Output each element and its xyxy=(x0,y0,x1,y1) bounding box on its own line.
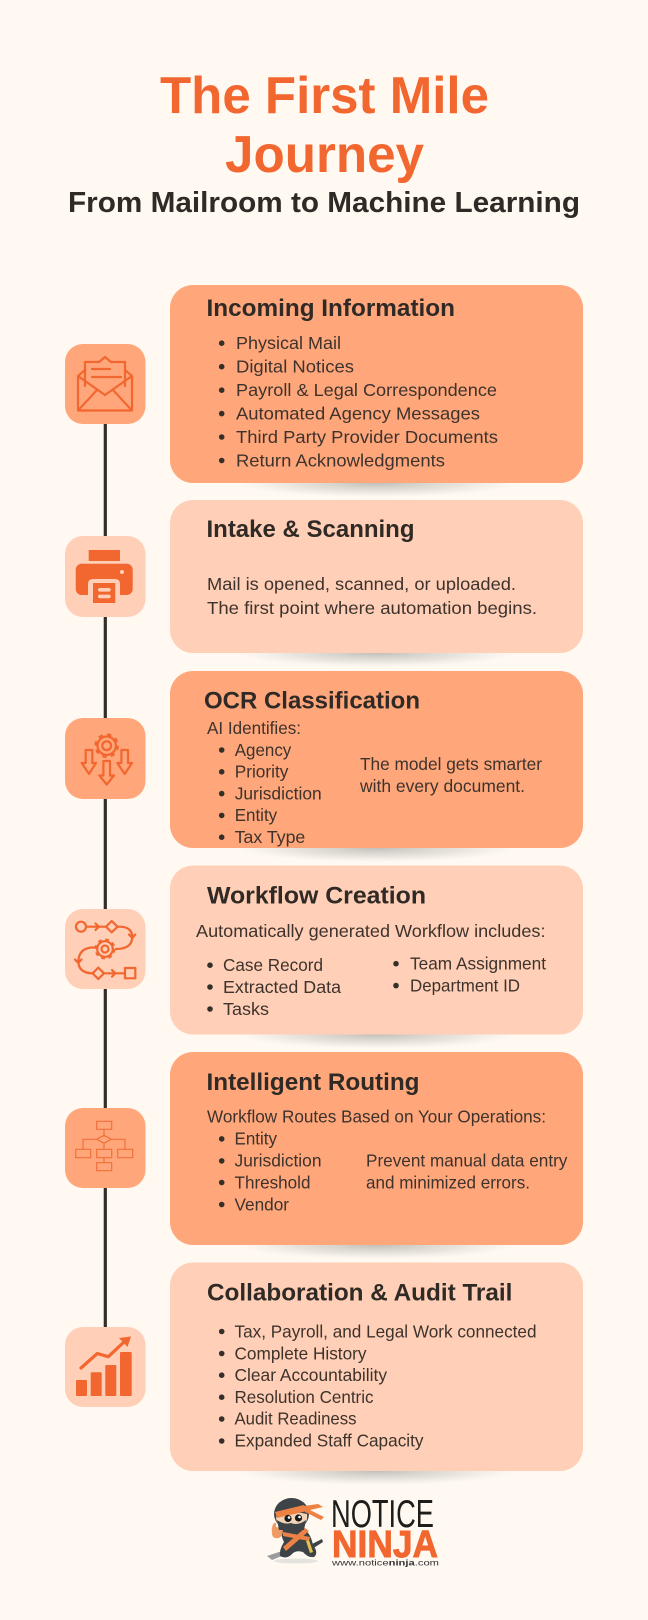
list: identified fields: Tax Type xyxy=(235,827,305,847)
list: routing criteria: Threshold xyxy=(234,1172,310,1192)
text: prevent manual entry: and minimized errors. xyxy=(366,1172,530,1192)
list: collaboration benefits: Clear Accountability xyxy=(234,1365,387,1385)
list: workflow items right: Department ID xyxy=(410,975,520,995)
list: collaboration benefits: Tax, Payroll, and Legal Work connected xyxy=(234,1321,536,1341)
icon: printer xyxy=(65,536,146,617)
text: intake description: Mail is opened, scanned, or uploaded. xyxy=(207,574,516,594)
panel: collaboration and audit trail xyxy=(170,1262,583,1485)
panel: incoming information xyxy=(170,285,583,497)
icon: growth chart xyxy=(65,1327,146,1407)
list: identified fields xyxy=(219,740,322,847)
list: incoming sources: Payroll & Legal Correspondence xyxy=(236,380,497,400)
list: identified fields: Jurisdiction xyxy=(235,783,322,803)
title: The First Mile xyxy=(160,67,489,125)
panel: ocr classification xyxy=(170,671,583,862)
text: intake description xyxy=(207,574,537,618)
heading: intelligent routing: Intelligent Routing xyxy=(206,1069,420,1096)
title: Journey xyxy=(225,126,424,184)
list: routing criteria: Vendor xyxy=(234,1194,289,1214)
heading: incoming information: Incoming Information xyxy=(206,295,455,322)
title xyxy=(160,67,489,184)
logo: ninja mascot xyxy=(267,1498,324,1564)
heading: collaboration and audit trail: Collaboration & Audit Trail xyxy=(207,1280,512,1307)
list: identified fields: Entity xyxy=(235,805,277,825)
panel: intelligent routing xyxy=(170,1052,583,1259)
timeline line xyxy=(104,424,107,1327)
list: workflow items right: Team Assignment xyxy=(410,954,546,974)
logo: ninja wordmark: NINJA xyxy=(332,1524,438,1566)
list: workflow items left: Extracted Data xyxy=(223,977,341,997)
list: workflow items left xyxy=(207,955,341,1019)
panel: intake and scanning xyxy=(170,500,583,667)
icon: workflow process xyxy=(65,909,146,989)
list: routing criteria: Entity xyxy=(234,1129,277,1149)
text: ai identifies: AI Identifies: xyxy=(207,718,301,738)
logo: notice wordmark: NOTICE xyxy=(331,1493,434,1536)
list: incoming sources: Digital Notices xyxy=(236,356,354,376)
list: workflow items left: Case Record xyxy=(223,955,323,975)
list: routing criteria: Jurisdiction xyxy=(234,1151,322,1171)
text: model gets smarter: with every document. xyxy=(359,776,525,796)
text: prevent manual entry: Prevent manual data entry xyxy=(366,1151,568,1171)
text: intake description: The first point where automation begins. xyxy=(207,598,537,618)
list: incoming sources: Third Party Provider Documents xyxy=(236,427,498,447)
icon: envelope xyxy=(65,344,146,424)
heading: ocr classification: OCR Classification xyxy=(204,688,420,714)
heading: workflow creation: Workflow Creation xyxy=(207,882,426,909)
list: collaboration benefits xyxy=(219,1321,536,1451)
text: model gets smarter: The model gets smarter xyxy=(360,754,542,774)
subtitle: From Mailroom to Machine Learning xyxy=(68,187,580,219)
text: prevent manual entry xyxy=(366,1151,568,1192)
list: routing criteria xyxy=(219,1129,322,1214)
text: workflow intro: Automatically generated Workflow includes: xyxy=(196,921,546,941)
list: incoming sources: Automated Agency Messages xyxy=(236,403,480,423)
list: incoming sources: Return Acknowledgments xyxy=(236,450,445,470)
list: collaboration benefits: Audit Readiness xyxy=(234,1409,357,1429)
list: workflow items right xyxy=(393,954,546,995)
text: routing intro: Workflow Routes Based on Your Operations: xyxy=(207,1107,546,1127)
list: collaboration benefits: Expanded Staff Capacity xyxy=(234,1431,424,1451)
list: workflow items left: Tasks xyxy=(223,999,269,1019)
heading: intake and scanning: Intake & Scanning xyxy=(206,516,414,543)
icon: routing flowchart xyxy=(65,1108,146,1188)
list: identified fields: Priority xyxy=(235,762,289,782)
list: incoming sources xyxy=(219,333,498,470)
list: collaboration benefits: Complete History xyxy=(234,1343,367,1363)
logo: notice ninja xyxy=(267,1493,439,1568)
list: incoming sources: Physical Mail xyxy=(236,333,341,353)
icon: gear with arrows xyxy=(65,718,146,799)
list: collaboration benefits: Resolution Centric xyxy=(234,1387,374,1407)
panel: workflow creation xyxy=(170,866,583,1048)
list: identified fields: Agency xyxy=(235,740,291,760)
logo: website: www.notice ninja .com xyxy=(331,1558,439,1568)
text: model gets smarter xyxy=(359,754,542,796)
